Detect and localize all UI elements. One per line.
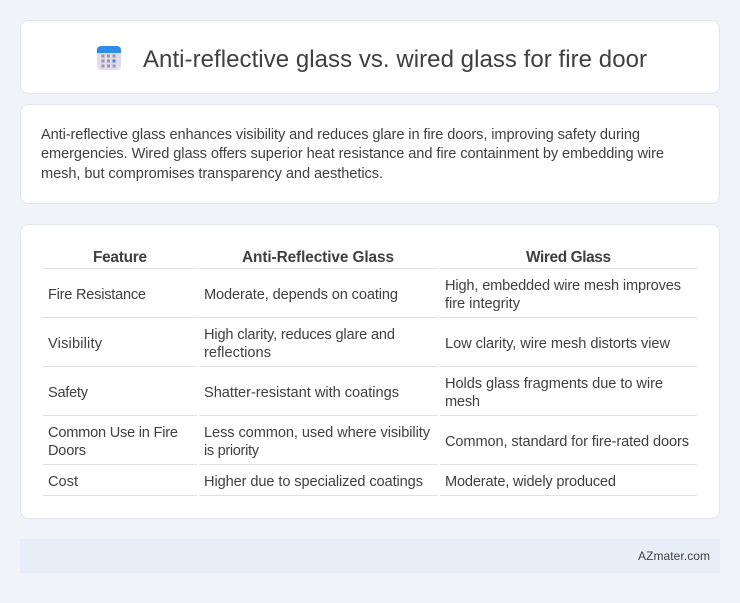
panel: comparison table (20, 224, 720, 518)
title: Anti-reflective glass vs. wired glass for fire door (143, 46, 647, 73)
table header (93, 249, 611, 266)
text block: introduction (41, 127, 664, 182)
row: common use in fire doors: Less common, used where visibility (204, 425, 431, 441)
table header: Wired Glass (526, 249, 611, 266)
row: common use in fire doors: is priority (204, 443, 260, 459)
row: common use in fire doors: Common Use in Fire (48, 425, 178, 441)
row: cost (48, 474, 616, 490)
row: safety: Shatter-resistant with coatings (204, 385, 399, 401)
panel: title card (20, 20, 720, 94)
row: safety: mesh (445, 394, 480, 410)
row: common use in fire doors: Common, standard for fire-rated doors (445, 434, 689, 450)
row: cost: Moderate, widely produced (445, 474, 616, 490)
footer credit: AZmater.com (638, 549, 710, 563)
panel: introduction (20, 104, 720, 204)
row: visibility: High clarity, reduces glare and (204, 327, 395, 343)
row: safety (48, 376, 663, 410)
row: fire resistance: High, embedded wire mesh improves (445, 278, 681, 294)
row: fire resistance: Moderate, depends on coating (204, 287, 398, 303)
text block: introduction: mesh, but compromises transparency and aesthetics. (41, 166, 383, 182)
row: visibility: Low clarity, wire mesh distorts view (445, 336, 670, 352)
row: safety: Holds glass fragments due to wire (445, 376, 663, 392)
row: common use in fire doors (48, 425, 689, 459)
icon: calendar (97, 46, 121, 70)
row: fire resistance (48, 278, 681, 312)
row: visibility: reflections (204, 345, 271, 361)
row: visibility (48, 327, 670, 361)
row: fire resistance: Fire Resistance (48, 287, 146, 303)
row: common use in fire doors: Doors (48, 443, 86, 459)
table header: Feature (93, 249, 147, 266)
row: fire resistance: fire integrity (445, 296, 521, 312)
table header: Anti-Reflective Glass (242, 249, 394, 266)
row: visibility: Visibility (48, 336, 103, 352)
text block: introduction: Anti-reflective glass enhances visibility and reduces glare in fire doors, improving safety during (41, 127, 640, 143)
footer bar (20, 539, 720, 573)
row: cost: Cost (48, 474, 78, 490)
row: cost: Higher due to specialized coatings (204, 474, 423, 490)
text block: introduction: emergencies. Wired glass offers superior heat resistance and fire containment by embedding wire (41, 146, 664, 162)
row: safety: Safety (48, 385, 89, 401)
